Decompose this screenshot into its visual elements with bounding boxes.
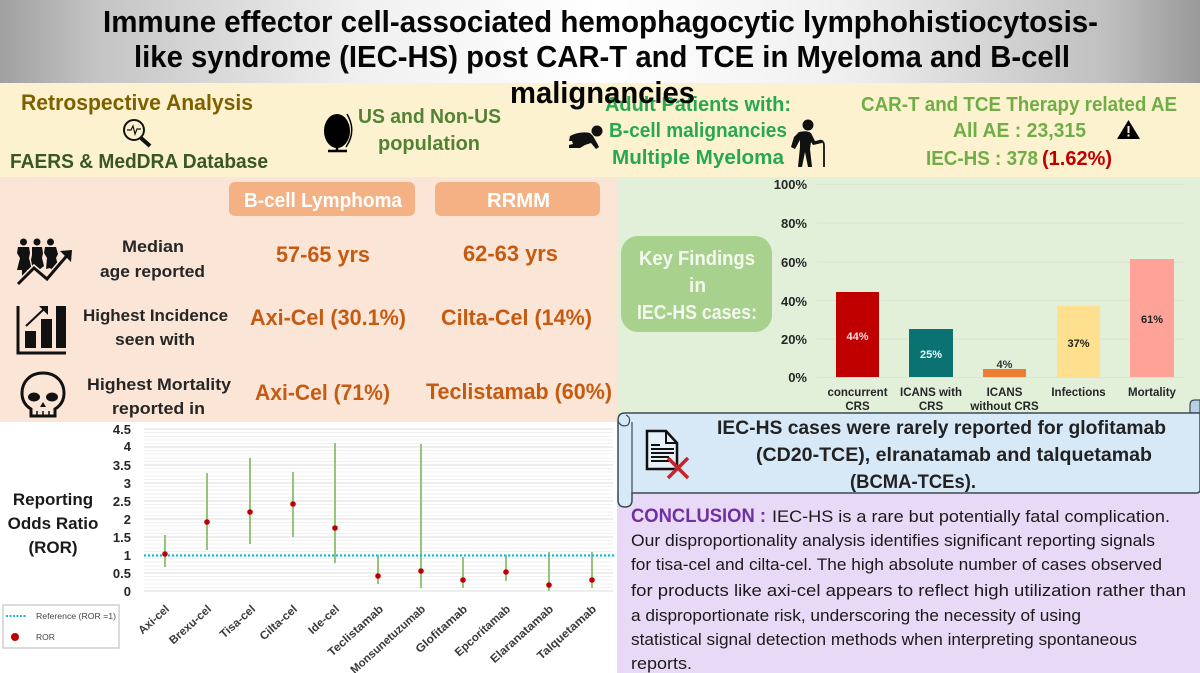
conclusion text: statistical signal detection methods when interpreting spontaneous bbox=[631, 630, 1137, 649]
text: population bbox=[358, 106, 501, 155]
panel: key findings bbox=[617, 177, 1200, 415]
bar: mortality: 61% bbox=[1141, 314, 1163, 326]
panel: conclusion bbox=[617, 493, 1200, 673]
y axis labels: 3.5 bbox=[113, 458, 131, 473]
text: adult patients bbox=[605, 94, 791, 169]
y axis labels: 40% bbox=[781, 294, 807, 309]
x axis labels: without CRS bbox=[969, 401, 1039, 413]
x axis labels: Brexu-cel bbox=[167, 603, 214, 647]
conclusion text: for tisa-cel and cilta-cel. The high absolute number of cases observed bbox=[631, 555, 1162, 574]
conclusion text: reports. bbox=[631, 654, 692, 673]
conclusion text: Our disproportionality analysis identifies significant reporting signals bbox=[631, 531, 1155, 550]
legend: ROR bbox=[36, 632, 55, 642]
icon: bar chart with arrow bbox=[18, 306, 66, 353]
icon: people with rising arrow bbox=[17, 238, 72, 284]
y axis labels: 20% bbox=[781, 332, 807, 347]
y axis labels: 2 bbox=[124, 512, 131, 527]
x axis labels: Epcoritamab bbox=[453, 603, 513, 659]
callout: key findings bbox=[621, 236, 772, 332]
x axis labels: ICANS bbox=[987, 387, 1023, 399]
icon: crawling baby bbox=[569, 126, 602, 149]
x axis labels bbox=[136, 603, 599, 673]
text: adverse events bbox=[861, 94, 1177, 170]
bar: ICANS with CRS: 25% bbox=[920, 349, 942, 361]
scroll text: (BCMA-TCEs). bbox=[850, 472, 976, 493]
heading: reporting odds ratio: (ROR) bbox=[28, 538, 78, 557]
title text: like syndrome (IEC-HS) post CAR-T and TCE in Myeloma and B-cell bbox=[134, 39, 1070, 74]
y axis labels: 0.5 bbox=[113, 566, 131, 581]
text: highest mortality: reported in bbox=[112, 399, 205, 418]
y axis labels: 60% bbox=[781, 255, 807, 270]
y axis labels: 0 bbox=[124, 584, 131, 599]
panel: reporting odds ratio chart bbox=[0, 422, 617, 673]
text: database: FAERS & MedDRA Database bbox=[10, 151, 268, 173]
icon: skull bbox=[22, 373, 64, 416]
callout: scroll banner bbox=[618, 400, 1200, 507]
value: rrmm mortality: Teclistamab (60%) bbox=[426, 379, 612, 404]
bar: ICANS with CRS bbox=[909, 329, 953, 377]
text: population: population bbox=[378, 133, 480, 155]
ROR points bbox=[162, 501, 595, 588]
x axis labels: concurrent bbox=[827, 387, 888, 399]
value: rrmm incidence: Cilta-Cel (14%) bbox=[441, 305, 592, 330]
bar: infections: 37% bbox=[1067, 338, 1090, 350]
text: adverse events: CAR-T and TCE Therapy related AE bbox=[861, 94, 1177, 116]
icon: warning triangle bbox=[1117, 120, 1140, 139]
text: adverse events: (1.62%) bbox=[1042, 148, 1112, 170]
icon: magnifier bbox=[124, 120, 150, 146]
text: adult patients: B-cell malignancies bbox=[609, 120, 787, 142]
text: population: US and Non-US bbox=[358, 106, 501, 128]
bar: mortality bbox=[1130, 259, 1174, 377]
y axis labels: 3 bbox=[124, 476, 131, 491]
text: highest incidence bbox=[83, 306, 228, 349]
x axis labels: Talquetamab bbox=[535, 603, 599, 662]
conclusion text: for products like axi-cel appears to reflect high utilization rather than bbox=[631, 581, 1186, 600]
scroll text bbox=[717, 418, 1166, 493]
x axis labels: Ide-cel bbox=[306, 603, 342, 637]
conclusion heading: CONCLUSION : bbox=[631, 506, 766, 527]
scroll text: IEC-HS cases were rarely reported for glofitamab bbox=[717, 418, 1166, 439]
header: b-cell lymphoma: B-cell Lymphoma bbox=[244, 190, 403, 212]
conclusion text: IEC-HS is a rare but potentially fatal complication. bbox=[772, 507, 1170, 526]
x axis labels: Mortality bbox=[1128, 387, 1177, 399]
value: rrmm age: 62-63 yrs bbox=[463, 241, 558, 266]
callout: key findings: IEC-HS cases: bbox=[637, 302, 757, 324]
y axis labels: 4.5 bbox=[113, 422, 131, 437]
value: lymphoma age: 57-65 yrs bbox=[276, 242, 370, 267]
y axis labels: 100% bbox=[774, 177, 807, 192]
x axis labels: Cilta-cel bbox=[258, 603, 300, 643]
x axis labels: Teclistamab bbox=[326, 603, 386, 659]
conclusion text: a disproportionate risk, underscoring the necessity of using bbox=[631, 606, 1081, 625]
panel: demographics and incidence bbox=[0, 177, 617, 422]
y axis labels: 1 bbox=[124, 548, 131, 563]
title text: Immune effector cell-associated hemophagocytic lymphohistiocytosis- bbox=[103, 4, 1098, 39]
x axis labels: Infections bbox=[1051, 387, 1106, 399]
icon: globe bbox=[324, 114, 352, 151]
legend bbox=[3, 605, 119, 648]
icon: document with red cross bbox=[647, 431, 688, 478]
x axis labels bbox=[827, 387, 1177, 413]
title banner bbox=[0, 0, 1200, 110]
conclusion text bbox=[631, 507, 1186, 673]
reference line at ROR 1 bbox=[144, 554, 615, 557]
x axis labels: Elaranatamab bbox=[489, 603, 556, 666]
header: rrmm: RRMM bbox=[487, 190, 550, 212]
bar: infections bbox=[1057, 306, 1100, 377]
x axis labels: Tisa-cel bbox=[218, 603, 258, 641]
y axis labels bbox=[774, 177, 807, 385]
y axis labels: 4 bbox=[124, 439, 132, 454]
x axis labels: Glofitamab bbox=[414, 603, 470, 656]
text: retrospective analysis: Retrospective Analysis bbox=[21, 90, 253, 115]
text: adult patients: Adult Patients with: bbox=[605, 94, 791, 116]
callout: key findings: in bbox=[689, 275, 706, 297]
bar: concurrent CRS: 44% bbox=[846, 331, 869, 343]
heading: reporting odds ratio: Reporting bbox=[13, 490, 93, 509]
y axis labels: 0% bbox=[788, 370, 807, 385]
y axis labels: 1.5 bbox=[113, 530, 131, 545]
title text bbox=[103, 4, 1098, 110]
x axis labels: Axi-cel bbox=[136, 603, 172, 637]
callout: key findings: Key Findings bbox=[639, 248, 755, 270]
heading: reporting odds ratio bbox=[8, 490, 98, 557]
header: b-cell lymphoma bbox=[229, 182, 415, 216]
bar chart: IEC-HS findings bbox=[774, 177, 1185, 413]
bar: concurrent CRS bbox=[836, 292, 879, 377]
y axis labels bbox=[113, 422, 132, 599]
value: lymphoma incidence: Axi-Cel (30.1%) bbox=[250, 305, 406, 330]
x axis labels: CRS bbox=[845, 401, 870, 413]
text: adverse events: All AE : 23,315 bbox=[953, 120, 1086, 142]
text: adult patients: Multiple Myeloma bbox=[612, 147, 785, 169]
y axis labels: 2.5 bbox=[113, 494, 131, 509]
x axis labels: ICANS with bbox=[900, 387, 962, 399]
title text: malignancies bbox=[510, 75, 695, 110]
scroll text: (CD20-TCE), elranatamab and talquetamab bbox=[756, 445, 1152, 466]
text: highest mortality bbox=[87, 375, 232, 418]
legend: Reference (ROR =1) bbox=[36, 611, 116, 621]
text: median age: age reported bbox=[100, 262, 205, 281]
panel: information band bbox=[0, 83, 1200, 177]
text: highest incidence: Highest Incidence bbox=[83, 306, 228, 325]
text: adverse events: IEC-HS : 378 bbox=[926, 148, 1038, 170]
text: highest mortality: Highest Mortality bbox=[87, 375, 232, 394]
value: lymphoma mortality: Axi-Cel (71%) bbox=[255, 380, 390, 405]
header: rrmm bbox=[435, 182, 600, 216]
text: highest incidence: seen with bbox=[115, 330, 195, 349]
text: median age: Median bbox=[122, 237, 184, 256]
confidence interval whiskers bbox=[165, 443, 592, 591]
text: median age bbox=[100, 237, 205, 281]
y axis labels: 80% bbox=[781, 216, 807, 231]
bar: ICANS without CRS: 4% bbox=[997, 359, 1013, 371]
heading: reporting odds ratio: Odds Ratio bbox=[8, 514, 98, 533]
bar: ICANS without CRS bbox=[983, 359, 1026, 377]
x axis labels: CRS bbox=[919, 401, 943, 413]
icon: elderly person with cane bbox=[791, 120, 824, 167]
